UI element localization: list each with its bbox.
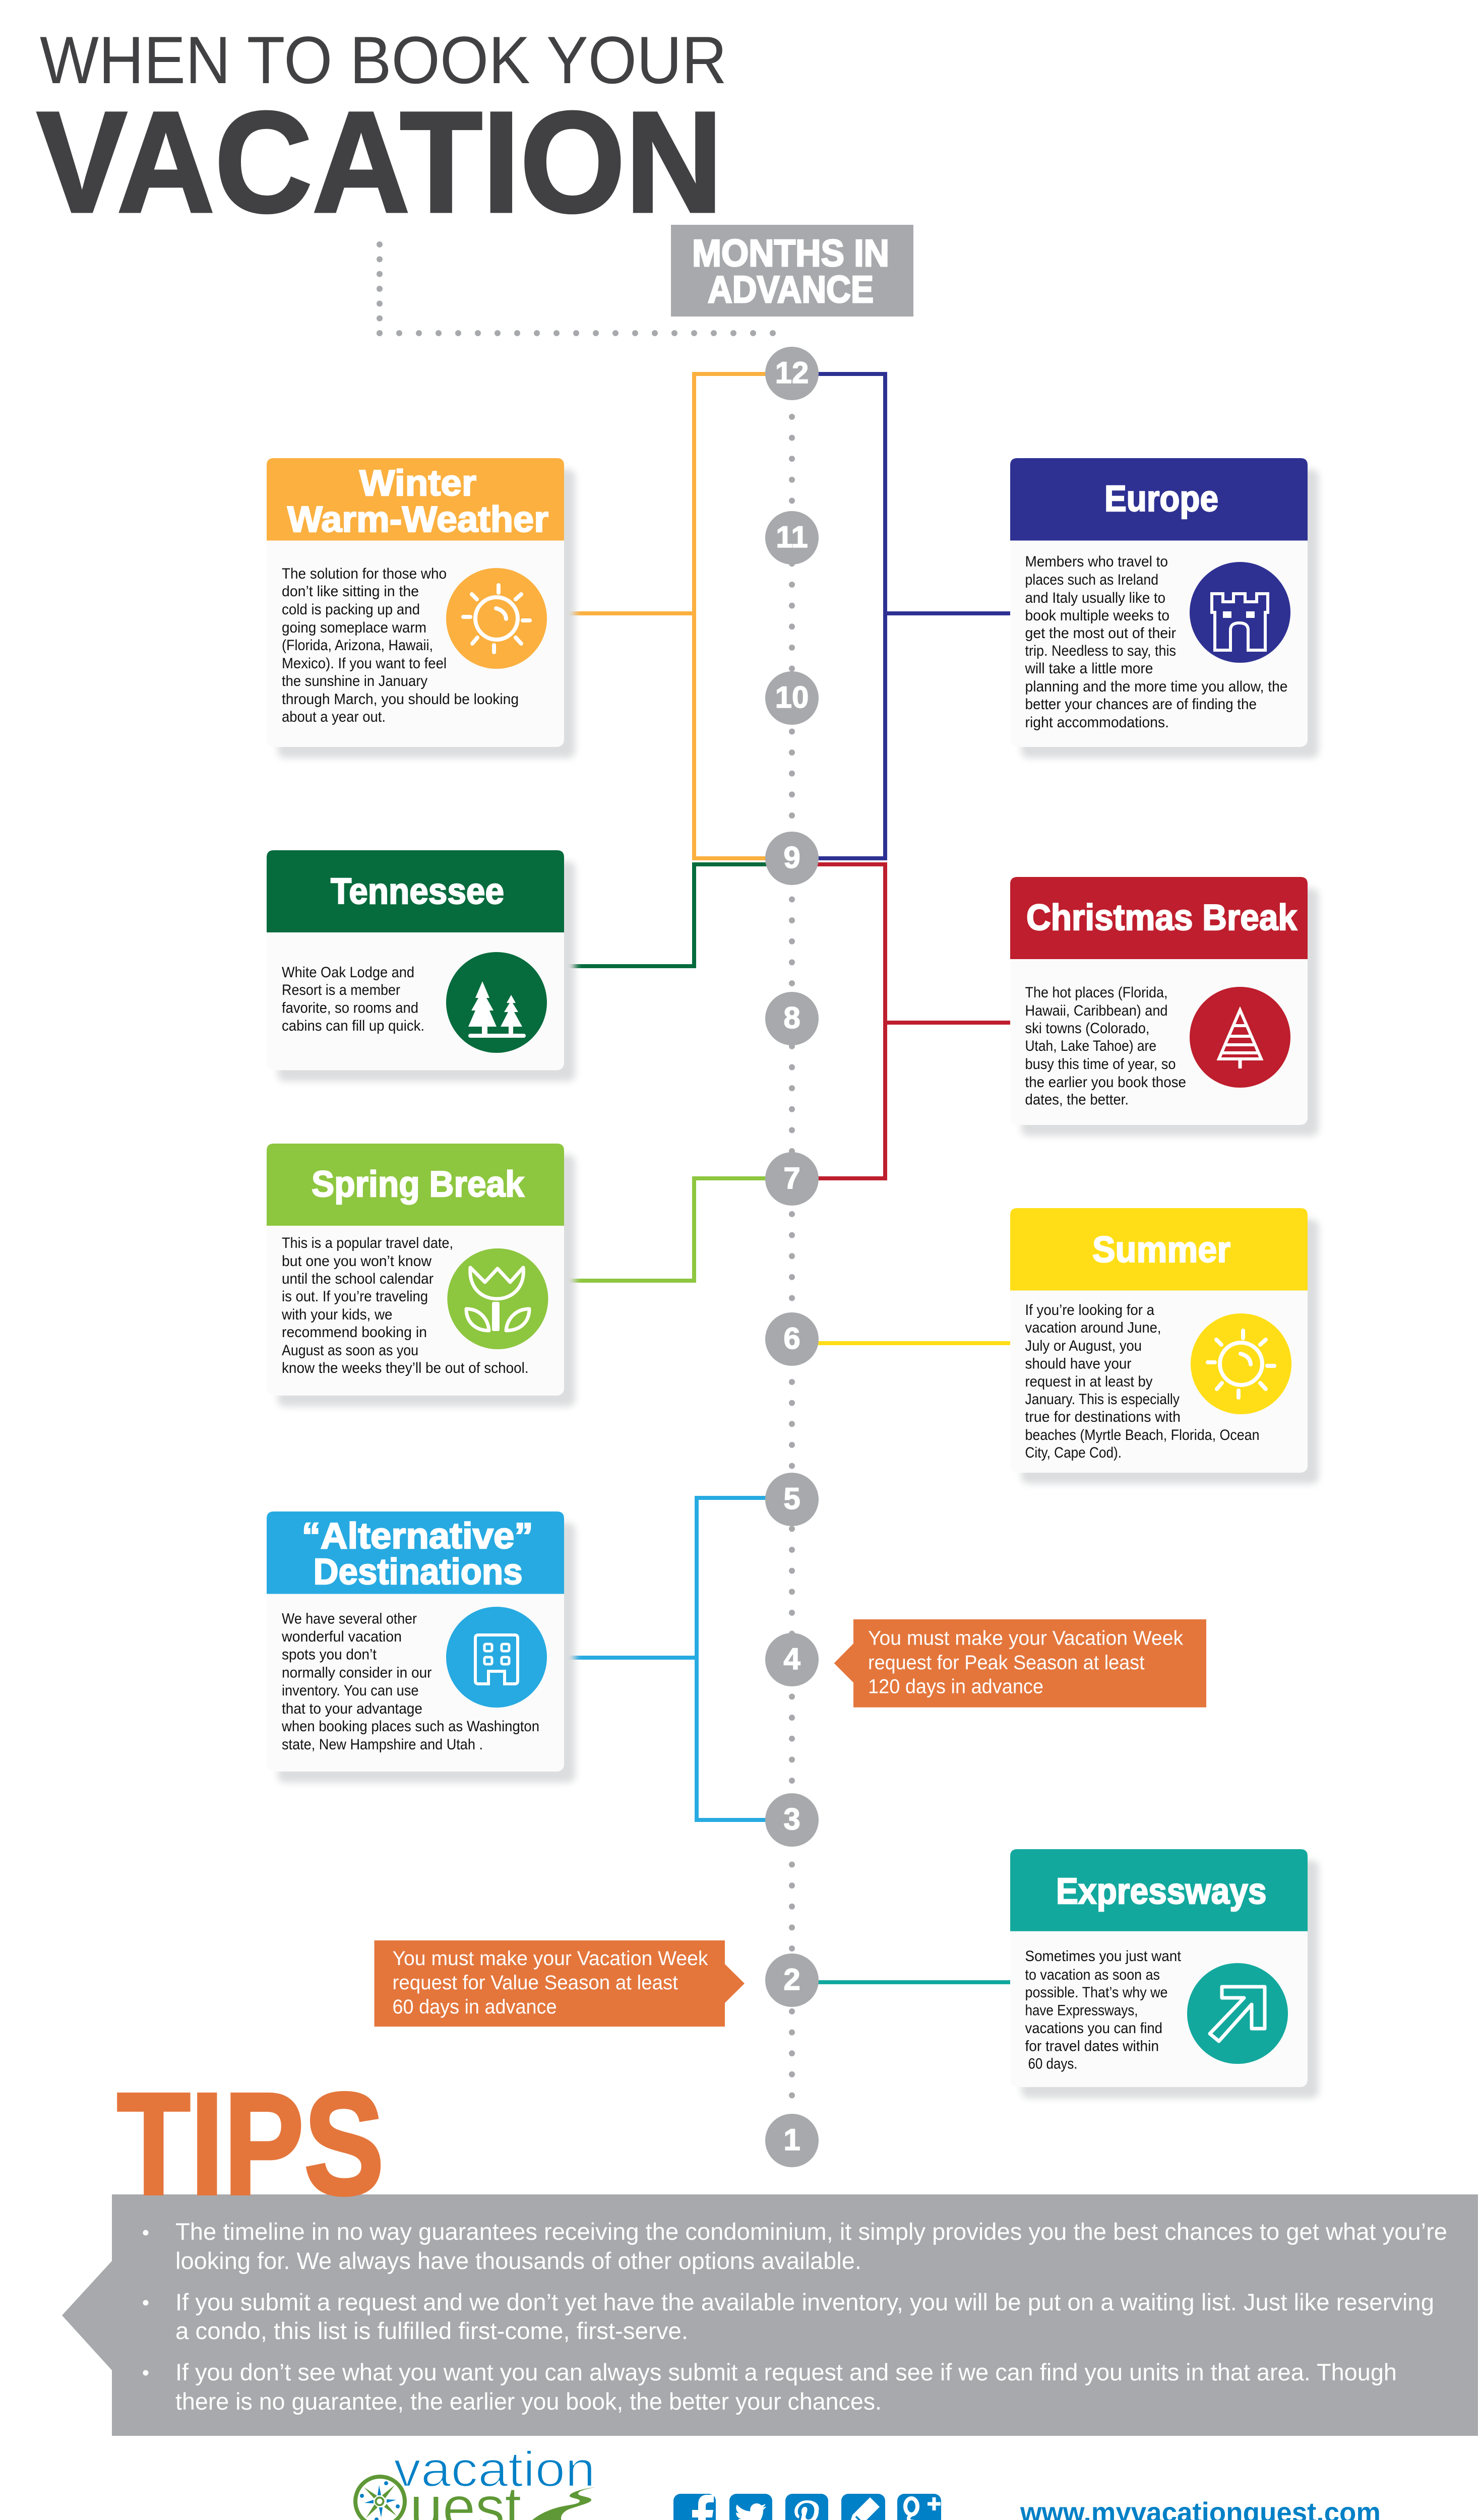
tips text: looking for. We always have thousands of other options available. [175,2247,861,2274]
panel: alternative destinations [267,1511,575,1783]
body text: Mexico). If you want to feel [282,655,447,672]
body text: This is a popular travel date, [282,1235,453,1251]
heading: Expressways [1056,1871,1266,1912]
heading [302,1516,533,1592]
social icons [673,2494,941,2520]
heading: Spring Break [312,1164,525,1205]
body text: is out. If you’re traveling [282,1288,428,1305]
title: WHEN TO BOOK YOUR [40,23,727,98]
icon: sun [1191,1313,1291,1414]
body text: better your chances are of finding the [1025,696,1257,713]
callout: value season [374,1940,745,2027]
icon: sun [446,568,547,669]
timeline month markers: 6 [783,1321,800,1355]
winding road [525,2487,595,2520]
body text: with your kids, we [281,1306,392,1323]
body text: favorite, so rooms and [282,1000,418,1016]
icon: castle [1190,562,1290,663]
compass Q [355,2477,409,2520]
body text [1025,1302,1259,1461]
body text: through March, you should be looking [282,691,519,708]
body text: possible. That’s why we [1025,1984,1167,2001]
tips text: If you submit a request and we don’t yet have the available inventory, you will be put on a waiting list. Just like reserving [175,2289,1434,2315]
callout: value season: You must make your Vacation Week [392,1947,708,1970]
body text: true for destinations with [1025,1409,1181,1425]
tips text: a condo, this list is fulfilled first-come, first-serve. [175,2317,688,2344]
body text: (Florida, Arizona, Hawaii, [282,637,433,654]
heading: Destinations [314,1552,523,1592]
heading [287,463,548,540]
body text: vacations you can find [1025,2020,1162,2037]
body text: but one you won’t know [282,1253,431,1270]
body text: that to your advantage [282,1700,422,1717]
timeline month markers: 5 [783,1482,800,1516]
tips text [175,2218,1447,2415]
dotted timeline [789,417,795,2096]
callout: peak season [834,1619,1206,1708]
body text: book multiple weeks to [1025,607,1169,624]
body text: for travel dates within [1025,2038,1159,2054]
tips text: If you don’t see what you want you can always submit a request and see if we can find you units in that area. Though [175,2359,1397,2385]
panel: spring break [267,1144,575,1407]
body text: cold is packing up and [282,601,420,618]
body text: City, Cape Cod). [1025,1444,1122,1461]
timeline month markers: 3 [783,1802,800,1836]
body text [1025,553,1287,731]
timeline month markers: 4 [783,1642,800,1676]
body text: request in at least by [1025,1373,1152,1390]
callout: peak season: request for Peak Season at least [868,1652,1145,1674]
body text: places such as Ireland [1025,572,1158,588]
panel: christmas break [1010,877,1319,1136]
callout: peak season: 120 days in advance [868,1676,1043,1698]
heading: Winter [359,463,476,503]
body text: the sunshine in January [282,673,427,689]
heading: Europe [1104,479,1218,519]
body text: planning and the more time you allow, the [1025,678,1287,695]
body text: 60 days. [1028,2056,1078,2072]
body text: Members who travel to [1025,553,1168,570]
body text [1025,1948,1182,2072]
icon: trees [446,952,547,1053]
body text: January. This is especially [1025,1391,1180,1408]
connector lines [564,374,1010,1982]
tip bullets [143,2230,148,2376]
panel: winter warm-weather [267,458,575,758]
body text: The solution for those who [282,565,447,582]
title: VACATION [37,82,723,242]
body text: spots you don’t [282,1647,377,1663]
heading: “Alternative” [302,1516,533,1556]
body text: ski towns (Colorado, [1025,1020,1149,1037]
body text [282,964,424,1034]
icon: building [446,1607,547,1708]
months in advance label: ADVANCE [708,268,874,310]
body text: August as soon as you [282,1342,418,1359]
icon: twitter [729,2494,772,2520]
panel: summer [1010,1208,1319,1484]
body text: inventory. You can use [282,1682,418,1699]
body text: busy this time of year, so [1025,1056,1176,1073]
icon: tulip [447,1248,548,1349]
body text [282,565,519,725]
panel: europe [1010,458,1319,758]
callout: peak season: You must make your Vacation Week [868,1627,1184,1649]
body text: about a year out. [282,709,386,725]
timeline month markers: 9 [783,841,800,874]
body text: don’t like sitting in the [282,583,419,600]
tips heading: TIPS [117,2063,384,2225]
callout: value season: request for Value Season at least [392,1972,678,1994]
body text: going someplace warm [282,619,426,636]
heading: Tennessee [331,871,504,912]
months in advance label: MONTHS IN [692,232,889,274]
timeline month markers [765,347,819,2167]
timeline month markers: 1 [783,2123,800,2157]
body text: If you’re looking for a [1025,1302,1154,1318]
body text: trip. Needless to say, this [1025,643,1176,659]
timeline month markers: 10 [775,680,809,714]
body text: to vacation as soon as [1025,1967,1160,1983]
panel: tips [62,2194,1478,2436]
body text: will take a little more [1025,660,1153,677]
heading: Summer [1092,1230,1230,1270]
tips text: there is no guarantee, the earlier you book, the better your chances. [175,2388,882,2415]
body text: normally consider in our [282,1665,431,1681]
tips text: The timeline in no way guarantees receiving the condominium, it simply provides you the best chances to get what you’re [175,2218,1447,2245]
body text: Resort is a member [282,982,400,998]
body text: recommend booking in [282,1324,427,1341]
body text: beaches (Myrtle Beach, Florida, Ocean [1025,1427,1259,1443]
timeline month markers: 8 [783,1001,800,1035]
months in advance label [671,225,913,317]
icon: arrow [1187,1963,1288,2064]
icon: pencil [841,2494,885,2520]
body text: Hawaii, Caribbean) and [1025,1002,1167,1019]
body text: vacation around June, [1025,1319,1161,1336]
heading: Warm-Weather [287,499,548,540]
callout: value season: 60 days in advance [392,1996,557,2018]
panel: expressways [1010,1849,1319,2098]
timeline month markers: 7 [783,1161,800,1195]
body text: know the weeks they’ll be out of school. [282,1360,529,1376]
body text: get the most out of their [1025,625,1176,642]
body text: Sometimes you just want [1025,1948,1182,1965]
timeline month markers: 12 [775,356,809,390]
body text: have Expressways, [1025,2002,1138,2019]
body text: July or August, you [1025,1338,1142,1354]
body text: wonderful vacation [281,1628,402,1645]
body text: right accommodations. [1025,714,1169,731]
body text: when booking places such as Washington [281,1718,539,1735]
icon: google plus [897,2494,941,2520]
body text [1025,984,1186,1108]
icon: facebook [673,2494,716,2520]
timeline month markers: 2 [783,1963,800,1996]
panel: tennessee [267,850,575,1082]
logo: vacation quest: vacation [394,2441,595,2497]
body text: The hot places (Florida, [1025,984,1167,1001]
body text: Utah, Lake Tahoe) are [1025,1038,1156,1054]
body text: dates, the better. [1025,1092,1129,1108]
body text: state, New Hampshire and Utah . [282,1736,483,1753]
body text: until the school calendar [282,1271,434,1287]
body text: the earlier you book those [1025,1074,1186,1091]
body text: cabins can fill up quick. [282,1018,424,1034]
body text [281,1235,529,1376]
icon: christmas tree [1190,987,1290,1088]
icon: pinterest [785,2494,828,2520]
body text: and Italy usually like to [1025,590,1165,606]
body text: We have several other [282,1610,417,1627]
body text: White Oak Lodge and [282,964,414,981]
body text: should have your [1025,1356,1131,1372]
heading: Christmas Break [1026,898,1298,938]
dotted lead-in line [380,244,792,333]
logo: vacation quest [355,2441,604,2520]
timeline month markers: 11 [776,520,808,554]
body text [281,1610,539,1753]
